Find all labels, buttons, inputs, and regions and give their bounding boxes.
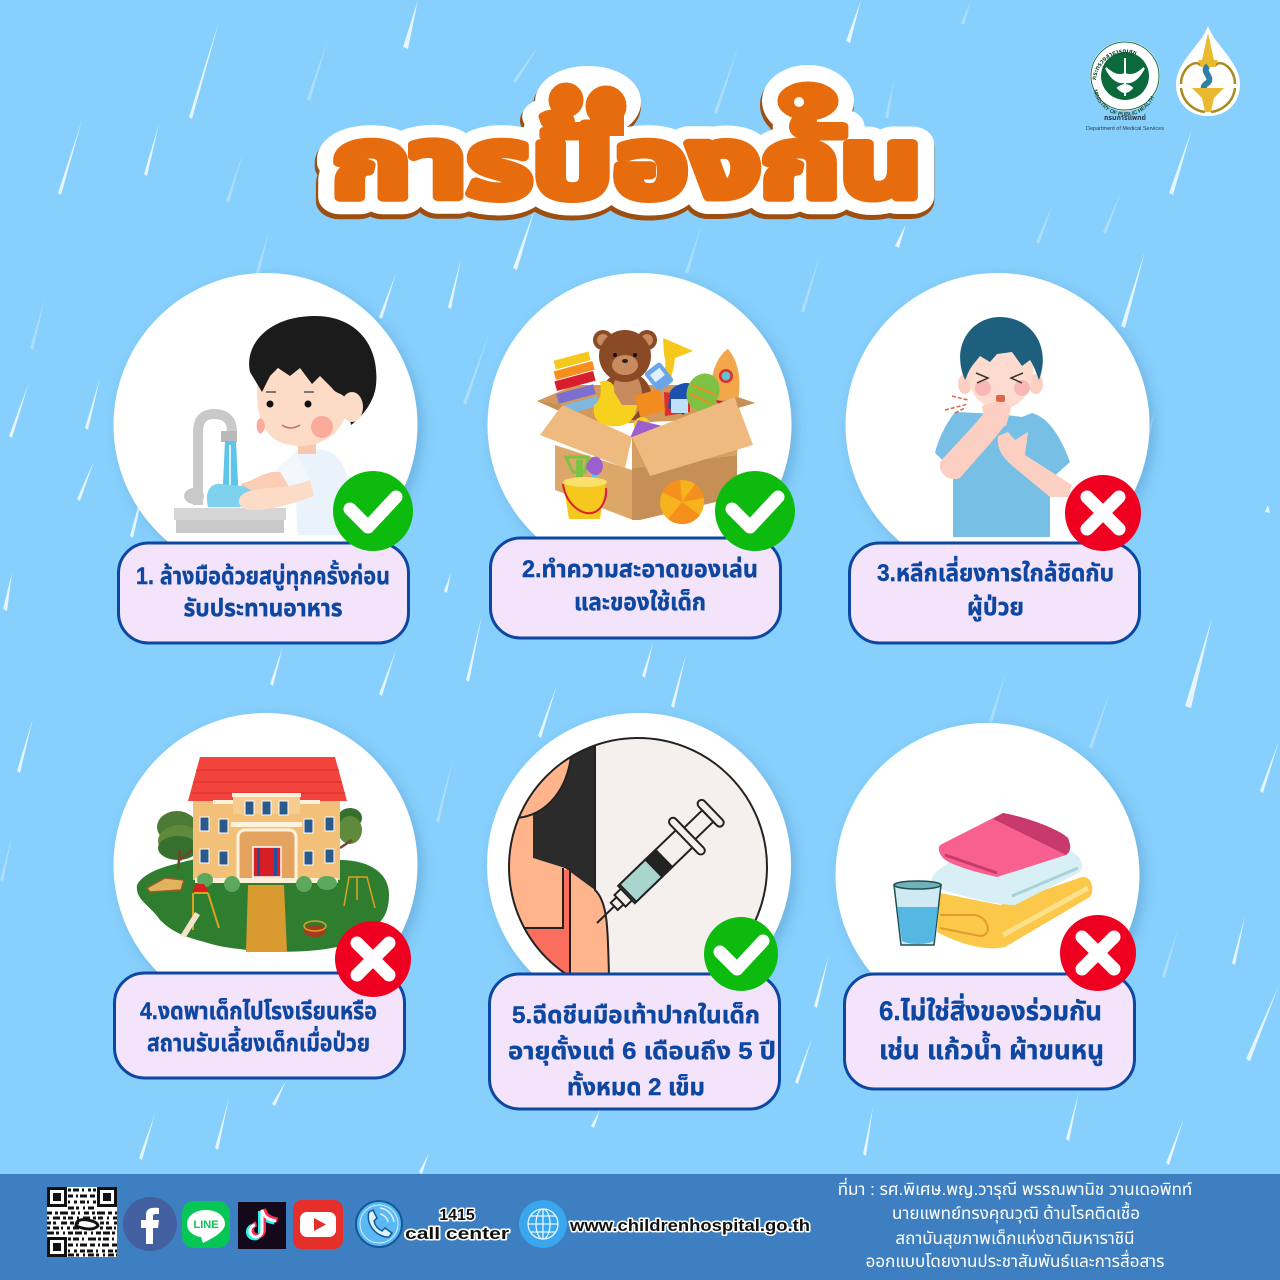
logo: children's institute <box>1176 26 1240 116</box>
logo: Ministry of Public Health: กรมการแพทย์ <box>1104 114 1146 122</box>
caption box 3: 3.หลีกเลี่ยงการใกล้ชิดกับ <box>877 556 1114 587</box>
caption box 2: 2.ทำความสะอาดของเล่น <box>522 555 758 583</box>
circle 5 <box>487 713 791 1017</box>
title <box>331 80 922 222</box>
caption box 5 <box>490 974 780 1109</box>
logo: Ministry of Public Health: กระทรวงสาธารณสุข <box>1092 49 1137 80</box>
call center label: call center <box>405 1224 509 1243</box>
website url: www.childrenhospital.go.th <box>569 1216 810 1235</box>
logo: Ministry of Public Health: MINISTRY OF PUBLIC HEALTH <box>1094 89 1154 116</box>
panel 3: avoid close contact <box>846 273 1150 643</box>
icon: tiktok <box>238 1202 286 1249</box>
QR code <box>47 1187 117 1257</box>
illustration: school <box>137 757 389 952</box>
caption box 4 <box>114 973 404 1078</box>
caption box 6 <box>844 974 1134 1089</box>
caption box 2 <box>490 538 780 638</box>
illustration: syringe and arm <box>508 737 768 972</box>
icon: line <box>182 1201 230 1248</box>
title: การป้องกัน <box>332 108 922 218</box>
icon: globe <box>519 1200 567 1248</box>
panel 6: do not share items <box>836 723 1140 1089</box>
panel 5: vaccine <box>487 713 791 1109</box>
source credits <box>838 1177 1192 1271</box>
source credits: สถาบันสุขภาพเด็กแห่งชาติมหาราชินี <box>895 1229 1135 1249</box>
icon: youtube <box>293 1200 343 1249</box>
caption box 6: 6.ไม่ใช่สิ่งของร่วมกัน <box>879 994 1102 1026</box>
caption box 3 <box>850 543 1140 643</box>
logo: Ministry of Public Health <box>1086 41 1164 132</box>
panel 2: clean toys <box>488 273 795 638</box>
call center label: 1415 <box>439 1207 475 1224</box>
caption box 6: เช่น แก้วน้ำ ผ้าขนหนู <box>879 1031 1104 1066</box>
circle 3 <box>846 273 1150 577</box>
circle 2 <box>488 273 792 577</box>
caption box 1 <box>118 543 408 643</box>
caption box 4: 4.งดพาเด็กไปโรงเรียนหรือ <box>140 998 377 1025</box>
icon: line: LINE <box>193 1219 219 1231</box>
icon: cross 4 <box>335 921 411 997</box>
source credits: นายแพทย์ทรงคุณวุฒิ ด้านโรคติดเชื้อ <box>892 1201 1140 1224</box>
circle 6 <box>836 723 1140 1027</box>
icon: cross 6 <box>1060 915 1136 991</box>
icon: cross 3 <box>1065 475 1141 551</box>
source credits: ออกแบบโดยงานประชาสัมพันธ์และการสื่อสาร <box>866 1249 1164 1271</box>
title: การป้องกัน <box>331 112 921 222</box>
caption box 5: 5.ฉีดชีนมือเท้าปากในเด็ก <box>512 1001 760 1029</box>
panel 1: wash hands <box>114 273 418 643</box>
caption box 5: อายุตั้งแต่ 6 เดือนถึง 5 ปี <box>508 1035 776 1066</box>
illustration: boy washing hands <box>174 316 376 535</box>
caption box 1: รับประทานอาหาร <box>184 595 342 622</box>
caption box 4: สถานรับเลี้ยงเด็กเมื่อป่วย <box>147 1026 370 1057</box>
circle 4 <box>114 713 418 1017</box>
panel 4: keep child home from school <box>114 713 418 1078</box>
call center label <box>405 1207 509 1243</box>
icon: phone <box>356 1201 402 1247</box>
source credits: ที่มา : รศ.พิเศษ.พญ.วารุณี พรรณพานิช วานเดอพิทท์ <box>838 1177 1192 1200</box>
circle 1 <box>114 273 418 577</box>
illustration: towels and glass <box>894 813 1092 948</box>
caption box 1: 1. ล้างมือด้วยสบู่ทุกครั้งก่อน <box>136 560 390 591</box>
icon: check 5 <box>704 917 778 991</box>
caption box 5: ทั้งหมด 2 เข็ม <box>567 1071 705 1101</box>
icon: facebook <box>123 1197 177 1251</box>
caption box 3: ผู้ป่วย <box>967 593 1024 622</box>
icon: check 1 <box>333 471 413 551</box>
illustration: coughing boy <box>935 317 1072 537</box>
icon: check 2 <box>715 471 795 551</box>
caption box 2: และของใช้เด็ก <box>574 588 706 616</box>
title: การป้องกัน <box>332 108 922 218</box>
footer bar <box>0 1174 1280 1280</box>
logo: Ministry of Public Health: Department of Medical Services <box>1086 126 1164 132</box>
illustration: toy box <box>537 330 755 524</box>
